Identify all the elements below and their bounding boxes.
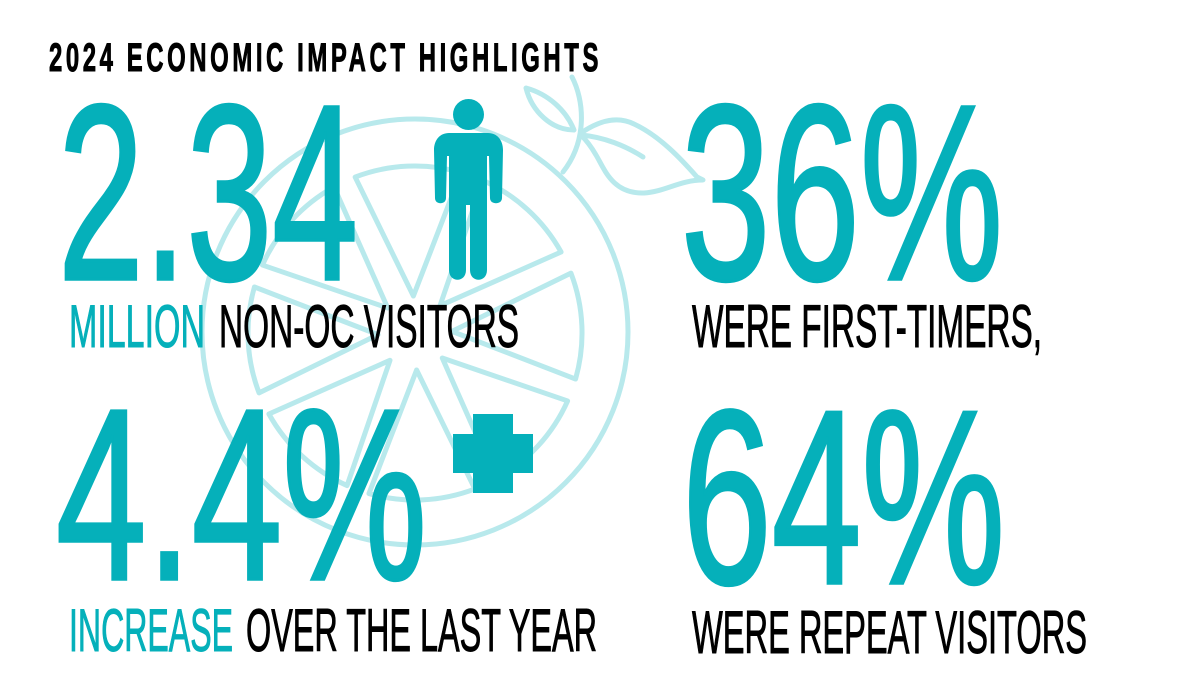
stat: 36%: 36% (681, 53, 1003, 332)
icon: plus sign (453, 414, 533, 493)
stat: 64%: 64% (682, 358, 1005, 636)
stat: 2.34: 2.34 (58, 53, 358, 332)
label words: over the last year: OVER THE LAST YEAR (246, 597, 597, 664)
label word: million: MILLION (69, 293, 205, 360)
label: million non-OC visitors (69, 293, 519, 360)
citrus wedges (246, 164, 584, 502)
title: 2024 ECONOMIC IMPACT HIGHLIGHTS (49, 36, 602, 80)
label: increase over the last year (69, 597, 597, 664)
stat: 4.4%: 4.4% (56, 358, 427, 631)
stem and leaves (526, 77, 703, 193)
label word: increase: INCREASE (69, 597, 233, 664)
background illustration: citrus slice with leaves (202, 77, 703, 545)
icon: person (434, 99, 503, 280)
citrus outer rind (202, 119, 628, 545)
label words: non-OC visitors: NON-OC VISITORS (219, 293, 519, 360)
